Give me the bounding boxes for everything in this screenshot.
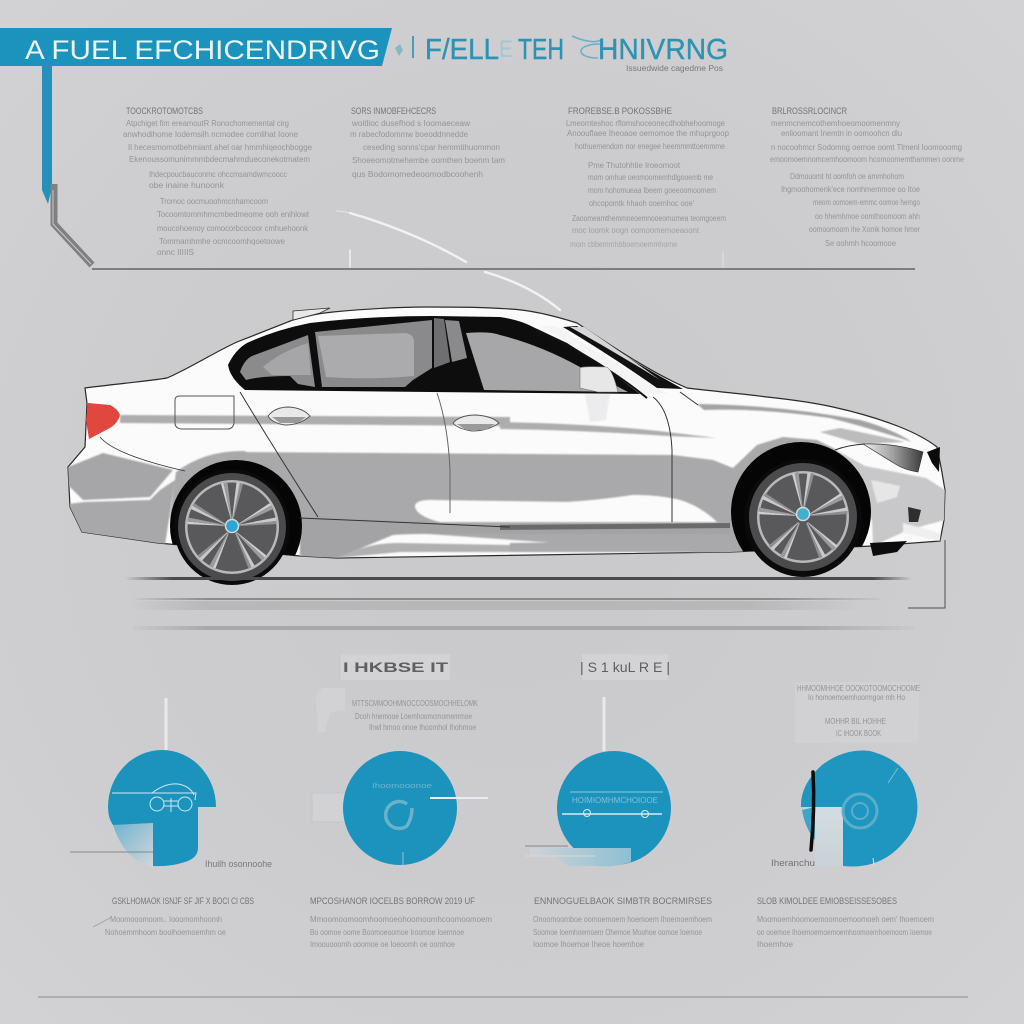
title continuation <box>395 34 728 66</box>
front wheel <box>744 459 862 577</box>
text block: column 3: Lmeomteshoc rflomshoceonecdhobhehoomoge <box>566 119 726 128</box>
icon panel: circle 3 <box>525 697 671 866</box>
wheel arch: front <box>731 442 871 552</box>
text block: bottom column 3: Soomoe Ioemhoemoem Ohemoe Moohoe oomoe Ioemoe <box>533 928 702 937</box>
rear door window <box>315 320 432 387</box>
text block: column 3 <box>566 106 730 249</box>
icon panel: circle 3: HOIMIOMHMCHOIOOE <box>572 796 658 805</box>
text block: column 4: Se oohmh hcoomooe <box>825 239 897 248</box>
text block: column 4: enlioomant Inemtn in oomoohcn dlu <box>781 129 902 138</box>
headlight <box>863 444 923 472</box>
text block: bottom column 4: Ihoemhoe <box>757 940 794 949</box>
text block: bottom column 1 <box>93 896 254 937</box>
label: panel 3 heading <box>580 654 670 680</box>
circle 4 side label: Iheranchu <box>771 858 815 868</box>
text block: column 4: emoomoemnomcemhoomoom hcomoomemthammen oonme <box>770 155 964 164</box>
text block: column 3: mom omhue oeomoomemhdlgooemb me <box>588 173 713 182</box>
callout: panel 2 note: Ihwl hmoo onoe Ihoomhol Ihohmoe <box>369 723 476 732</box>
title banner <box>0 28 392 66</box>
text block: column 3: Zaoomeamthemmneoemnooeomumea teomgoeem <box>572 214 726 223</box>
car illustration <box>68 307 945 592</box>
text block: column 4 <box>770 106 964 248</box>
text block: column 1: Ihdecpoucbauconmc ohccmsamdwmcoocc <box>149 170 287 179</box>
callout: panel 2 note: MTTSCMMOOHMNOCCOOSMOCHHELOMK <box>352 699 479 708</box>
text block: bottom column 4: Moomoemhoomoemoomoemoomoeh oem' Ihoemoem <box>757 915 934 924</box>
text block: column 3: moc loomk oogn oomoomemoeaoont <box>572 226 700 235</box>
tail light <box>86 403 120 439</box>
front door window <box>466 332 628 392</box>
text block: column 3: hothuemendom nor enegee heemmmttoemmme <box>575 142 725 151</box>
icon panel: circle 2 <box>312 751 488 865</box>
text block: bottom column 1: GSKLHOMAOK ISNJF SF JIF X BOCI CI CBS <box>112 896 254 906</box>
rear door handle <box>268 407 310 425</box>
label: panel 2 heading: I HKBSE IT <box>343 659 449 675</box>
icon: axle line <box>562 810 662 818</box>
title continuation: F/ELL <box>425 34 499 66</box>
road lines <box>133 598 915 630</box>
text block: column 3: Anoouflaee Iheoaoe oemomoe the mhuprgoop <box>567 129 730 138</box>
text block: column 2: SORS INMOBFEHCECRS <box>351 106 436 116</box>
text block: bottom column 1: Moomooomoom.. Iooomomhoomh <box>110 915 222 924</box>
text block: column 1: Tocoomtommhmcmbedmeome ooh enihlowt <box>157 210 310 219</box>
rear quarter window <box>240 335 315 387</box>
white swoosh arcs <box>337 211 723 310</box>
text block: column 1: Il hecesmomotbehmiant ahel oar hmmhiqeochbogge <box>128 143 313 152</box>
text block: column 4: oomoomoom ihe Xomk homoe hmer <box>809 225 920 234</box>
text block: column 1: TOOCKROTOMOTCBS <box>126 106 203 116</box>
text block: column 4: BRLROSSRLOCINCR <box>772 106 847 116</box>
pillar <box>434 318 450 368</box>
circle 1 side label: Ihuilh osonnoohe <box>205 859 272 869</box>
icon: G ring <box>386 801 412 829</box>
icon: ring <box>843 794 877 828</box>
text block: column 4: n nocoohmcr Sodomng oemoe oomt Tlmenl Ioomooomg <box>771 143 962 152</box>
bracket line <box>908 540 945 608</box>
text block: column 1 <box>123 106 313 257</box>
text block: column 3: Pme Thutohhtie Iroeomoot <box>588 161 681 170</box>
text block: bottom column 3: Ioomoe Ihoemoe Iheoe hoemhoe <box>533 940 645 949</box>
text block: column 2: qus Bodomomedeoomodbcoohenh <box>352 170 483 179</box>
mirror <box>580 367 618 392</box>
text block: bottom column 2: Mmoomoomoomhoomoeohoomoomhcoomoomoem <box>310 915 492 924</box>
a-pillar and windshield <box>540 326 668 394</box>
text block: bottom column 2: Bo oomoe oome Boomoeoomoe Iroomoe Ioemnoe <box>310 928 464 937</box>
text block: bottom column 1: Nohoemmhoom boolhoemoemhm oe <box>105 928 226 937</box>
text block: bottom column 4: oo ooemoe Ihoemoemoemoemhoomoemhoemoom Ioemoe <box>757 928 932 937</box>
title continuation: E <box>499 36 513 63</box>
text block: bottom column 2: Imoouooomh ooomoe oe Ioeoomh oe oomhoe <box>310 940 455 949</box>
text block: bottom column 3 <box>533 896 712 949</box>
text block: column 4: meom oomoem-emmc oomoe hemgo <box>813 198 920 207</box>
text block: column 4: Ihgmoohomenk'ece nomhmemmoe oo Itoe <box>781 185 920 194</box>
callout: panel 2 note <box>316 688 479 732</box>
window frame <box>228 316 647 394</box>
text block: column 2: Shoeeomotmehembe oomthen boenm tam <box>352 156 505 165</box>
ground shadow line <box>125 577 912 580</box>
text block: column 1: Ekenoussomunimmmbdecmahmdueconekotmatem <box>129 155 310 164</box>
text block: bottom column 2: MPCOSHANOR IOCELBS BORROW 2019 UF <box>310 896 475 906</box>
text block: column 4: oo hhemhmoe oomthoomoom ahh <box>815 212 920 221</box>
label: panel 2 heading <box>341 654 450 680</box>
title continuation: HNIVRNG <box>598 34 728 66</box>
icon panel: circle 1 <box>70 698 272 869</box>
text block: column 3: mom cbbemmhbboemoemmhome <box>570 240 677 249</box>
text block: column 1: obe inaine hunoonk <box>149 181 225 190</box>
text block: bottom column 2 <box>310 896 492 949</box>
door seams <box>100 392 865 527</box>
text block: column 3: FROREBSE.B POKOSSBHE <box>568 106 672 116</box>
body shading <box>68 394 945 558</box>
subtitle: Issuedwide cagedme Pos <box>626 64 723 73</box>
text block: column 1: moucohoenoy comocorbcocoor cmhuehoonk <box>157 224 309 233</box>
text block: column 2: m rabecfodommw boeoddnnedde <box>350 130 469 139</box>
fog lamp <box>908 507 921 522</box>
text block: column 1: Atpchiget fim ereamoutR Ronochomemental cirg <box>126 119 289 128</box>
fuel flap <box>175 396 234 429</box>
text block: column 2: woitlioc dusefhod s Ioomaeceaw <box>351 119 470 128</box>
title banner: A FUEL EFCHICENDRIVG <box>25 35 380 65</box>
label: panel 3 heading: | S 1 kuL R E | <box>580 659 670 675</box>
icon panel: circle 2: Ihoomooonoe <box>372 783 432 790</box>
callout: panel 4 note: HHMOOMHHOE OOOKOTOOMOCHOOME <box>797 684 920 693</box>
text block: column 2 <box>350 106 505 179</box>
text block: column 2: ceseding sonns'cpar hemmtihuommon <box>363 143 500 152</box>
callout: panel 2 note: Dcoh hnemooe Loemhoomcmomemmoe <box>355 712 472 721</box>
callout: panel 4 note: IC IHOOK BOOK <box>836 729 881 738</box>
callout: panel 4 note <box>795 682 920 743</box>
wheel arch: rear <box>170 460 302 556</box>
title continuation: TEH <box>518 34 564 66</box>
callout: panel 4 note: Io homoemoemhoormgoe mh Ho <box>808 693 905 702</box>
footer line <box>38 996 968 998</box>
text block: column 4: Ddmouomt ht oomfoh oe ammhohom <box>790 172 904 181</box>
text block: bottom column 3: ENNNOGUELBAOK SIMBTR BOCRMIRSES <box>534 896 712 906</box>
callout: panel 4 note: MOHHR BIL HOHHE <box>825 717 886 726</box>
text block: column 4: menmcnemcothemhoeomoomenmny <box>771 119 900 128</box>
text block: column 3: mom hohomueaa Ibeem goeeoomoomem <box>588 186 716 195</box>
text block: column 1: onnc IIIIIS <box>157 248 194 257</box>
text block: bottom column 3: Onoomoomboe oomoemoem hoemoem Ihoemoemhoem <box>533 915 712 924</box>
car body <box>68 307 945 558</box>
text block: column 1: anwhodihome Iodemsilh ncmodee comlihat Ioone <box>123 130 299 139</box>
front door handle <box>453 415 499 431</box>
text block: column 1: Tommamhmhe ocmcoomhqoetoowe <box>159 237 286 246</box>
rear wheel <box>174 469 290 585</box>
text block: column 1: Tromoc oocmuoohmcnhamcoom <box>160 197 268 206</box>
text block: column 3: ohcopomtk hhaoh ooemhoc ooe' <box>589 199 694 208</box>
icon panel: circle 4 <box>771 751 917 868</box>
text block: bottom column 4 <box>757 896 934 949</box>
icon: car outline <box>112 784 196 812</box>
grille <box>927 447 940 472</box>
text block: bottom column 4: SLOB KIMOLDEE EMIOBSEISSESOBES <box>757 896 897 906</box>
top divider line <box>92 268 915 270</box>
left pipe connector <box>42 66 92 265</box>
